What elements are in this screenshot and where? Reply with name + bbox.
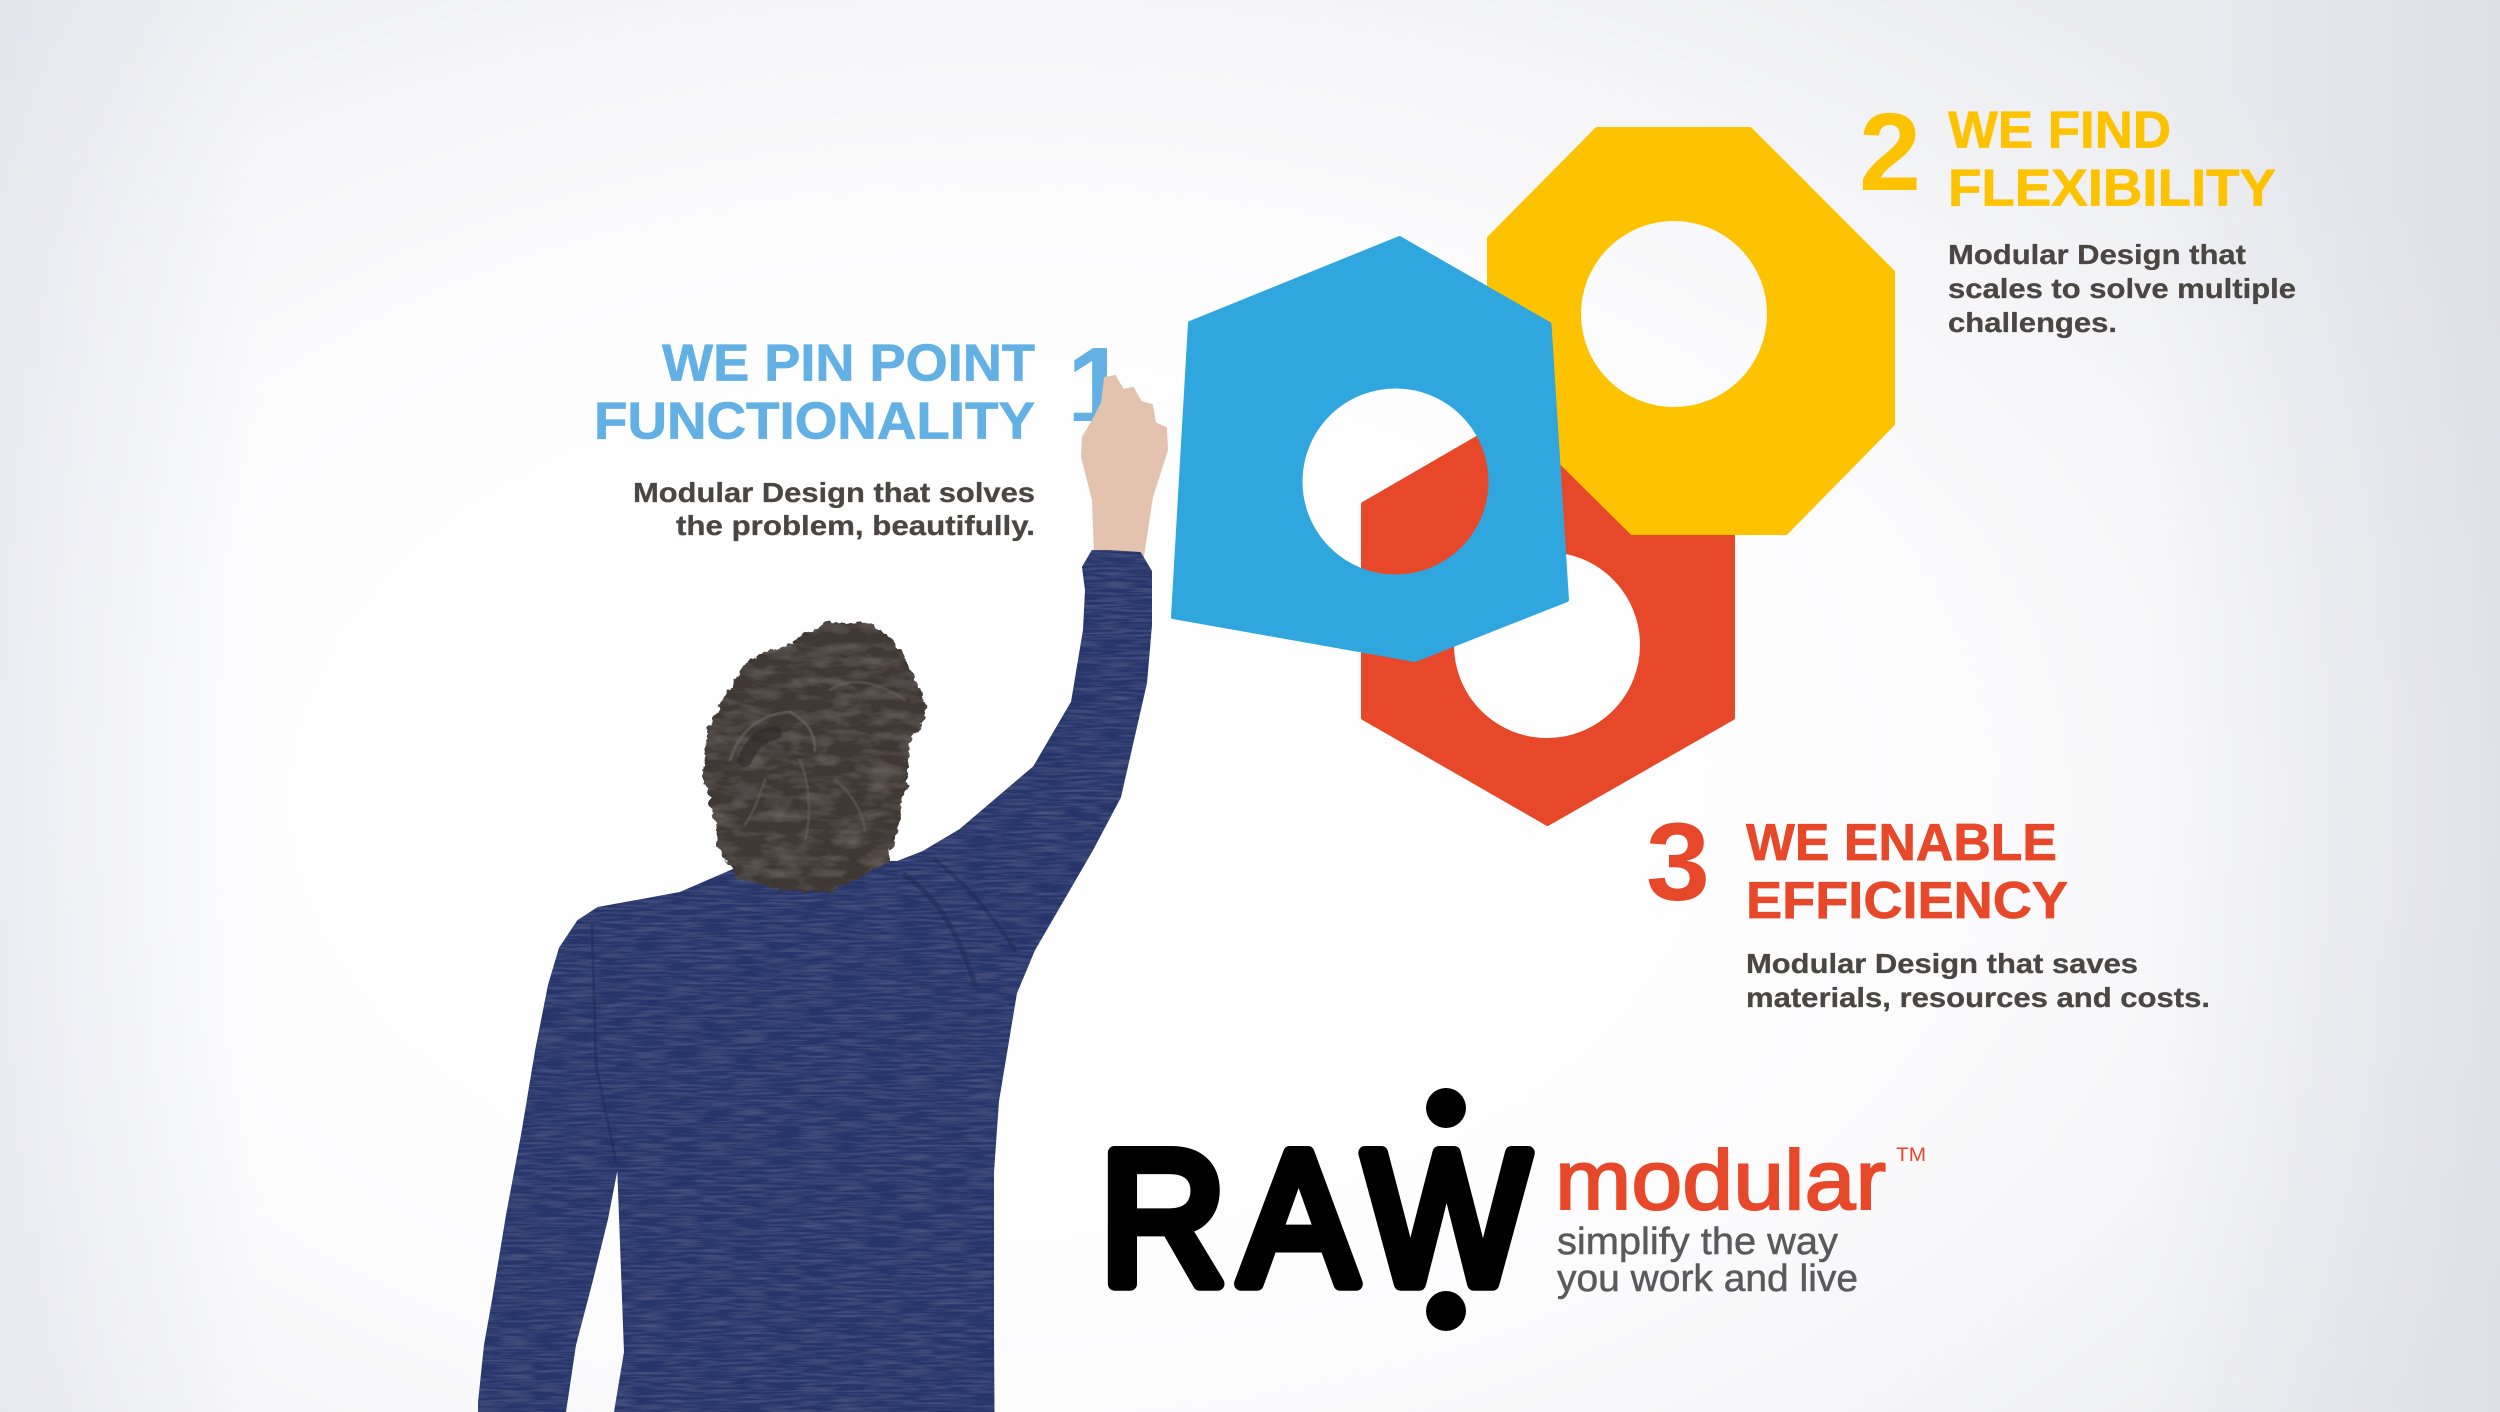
panel: interlocking modular nuts (1173, 129, 1893, 824)
icon: red hexagon nut (1363, 397, 1733, 824)
text block: step 3 description (1746, 948, 2210, 1013)
logo top dot (1426, 1088, 1466, 1128)
tagline: simplify the way (1557, 1221, 1838, 1263)
ear (886, 814, 898, 832)
text block: step 1 description (633, 477, 1035, 541)
text block: step 2 description: challenges. (1948, 307, 2117, 338)
text block: step 1 description: Modular Design that solves (633, 477, 1035, 508)
logo wordmark RAW: RAW (1100, 1112, 1529, 1324)
hair strands (730, 682, 905, 840)
text block: step 2 number: 2 (1859, 91, 1921, 214)
text block: step 3 description: materials, resources and costs. (1746, 982, 2210, 1013)
logo bottom dot (1426, 1291, 1466, 1331)
trademark: TM (1896, 1145, 1926, 1166)
heading: we find flexibility: WE FIND (1948, 102, 2171, 160)
heading: we enable efficiency (1746, 814, 2068, 930)
icon: blue hexagon nut (1173, 238, 1567, 660)
heading: we enable efficiency: WE ENABLE (1746, 814, 2057, 872)
shirt (478, 550, 1152, 1412)
heading: we find flexibility (1948, 102, 2276, 218)
text block: step 2 description: scales to solve multiple (1948, 273, 2296, 304)
text block: step 2 description: Modular Design that (1948, 239, 2246, 270)
heading: we find flexibility: FLEXIBILITY (1948, 160, 2276, 218)
heading: we pin point functionality: FUNCTIONALITY (594, 392, 1035, 450)
heading: we enable efficiency: EFFICIENCY (1746, 872, 2068, 930)
logo: RAW modular (1100, 1088, 1926, 1331)
hair (703, 622, 927, 893)
text block: step 3 number: 3 (1646, 801, 1710, 924)
text block: step 1 description: the problem, beautifully. (676, 510, 1035, 541)
modular word: modular (1555, 1133, 1886, 1227)
hand (1082, 376, 1167, 556)
shirt folds and seam (592, 860, 1015, 1162)
infographic canvas (478, 111, 2296, 1412)
text block: step 1 number: 1 (1067, 325, 1127, 448)
figure: man pointing from behind (478, 376, 1167, 1412)
text block: step 3 description: Modular Design that saves (1746, 948, 2138, 979)
tagline (1557, 1221, 1858, 1300)
heading: we pin point functionality: WE PIN POINT (662, 334, 1035, 392)
text block: step 2 description (1948, 239, 2296, 338)
icon: yellow octagon nut (1489, 129, 1893, 533)
tagline: you work and live (1557, 1258, 1858, 1300)
heading: we pin point functionality (594, 334, 1035, 450)
